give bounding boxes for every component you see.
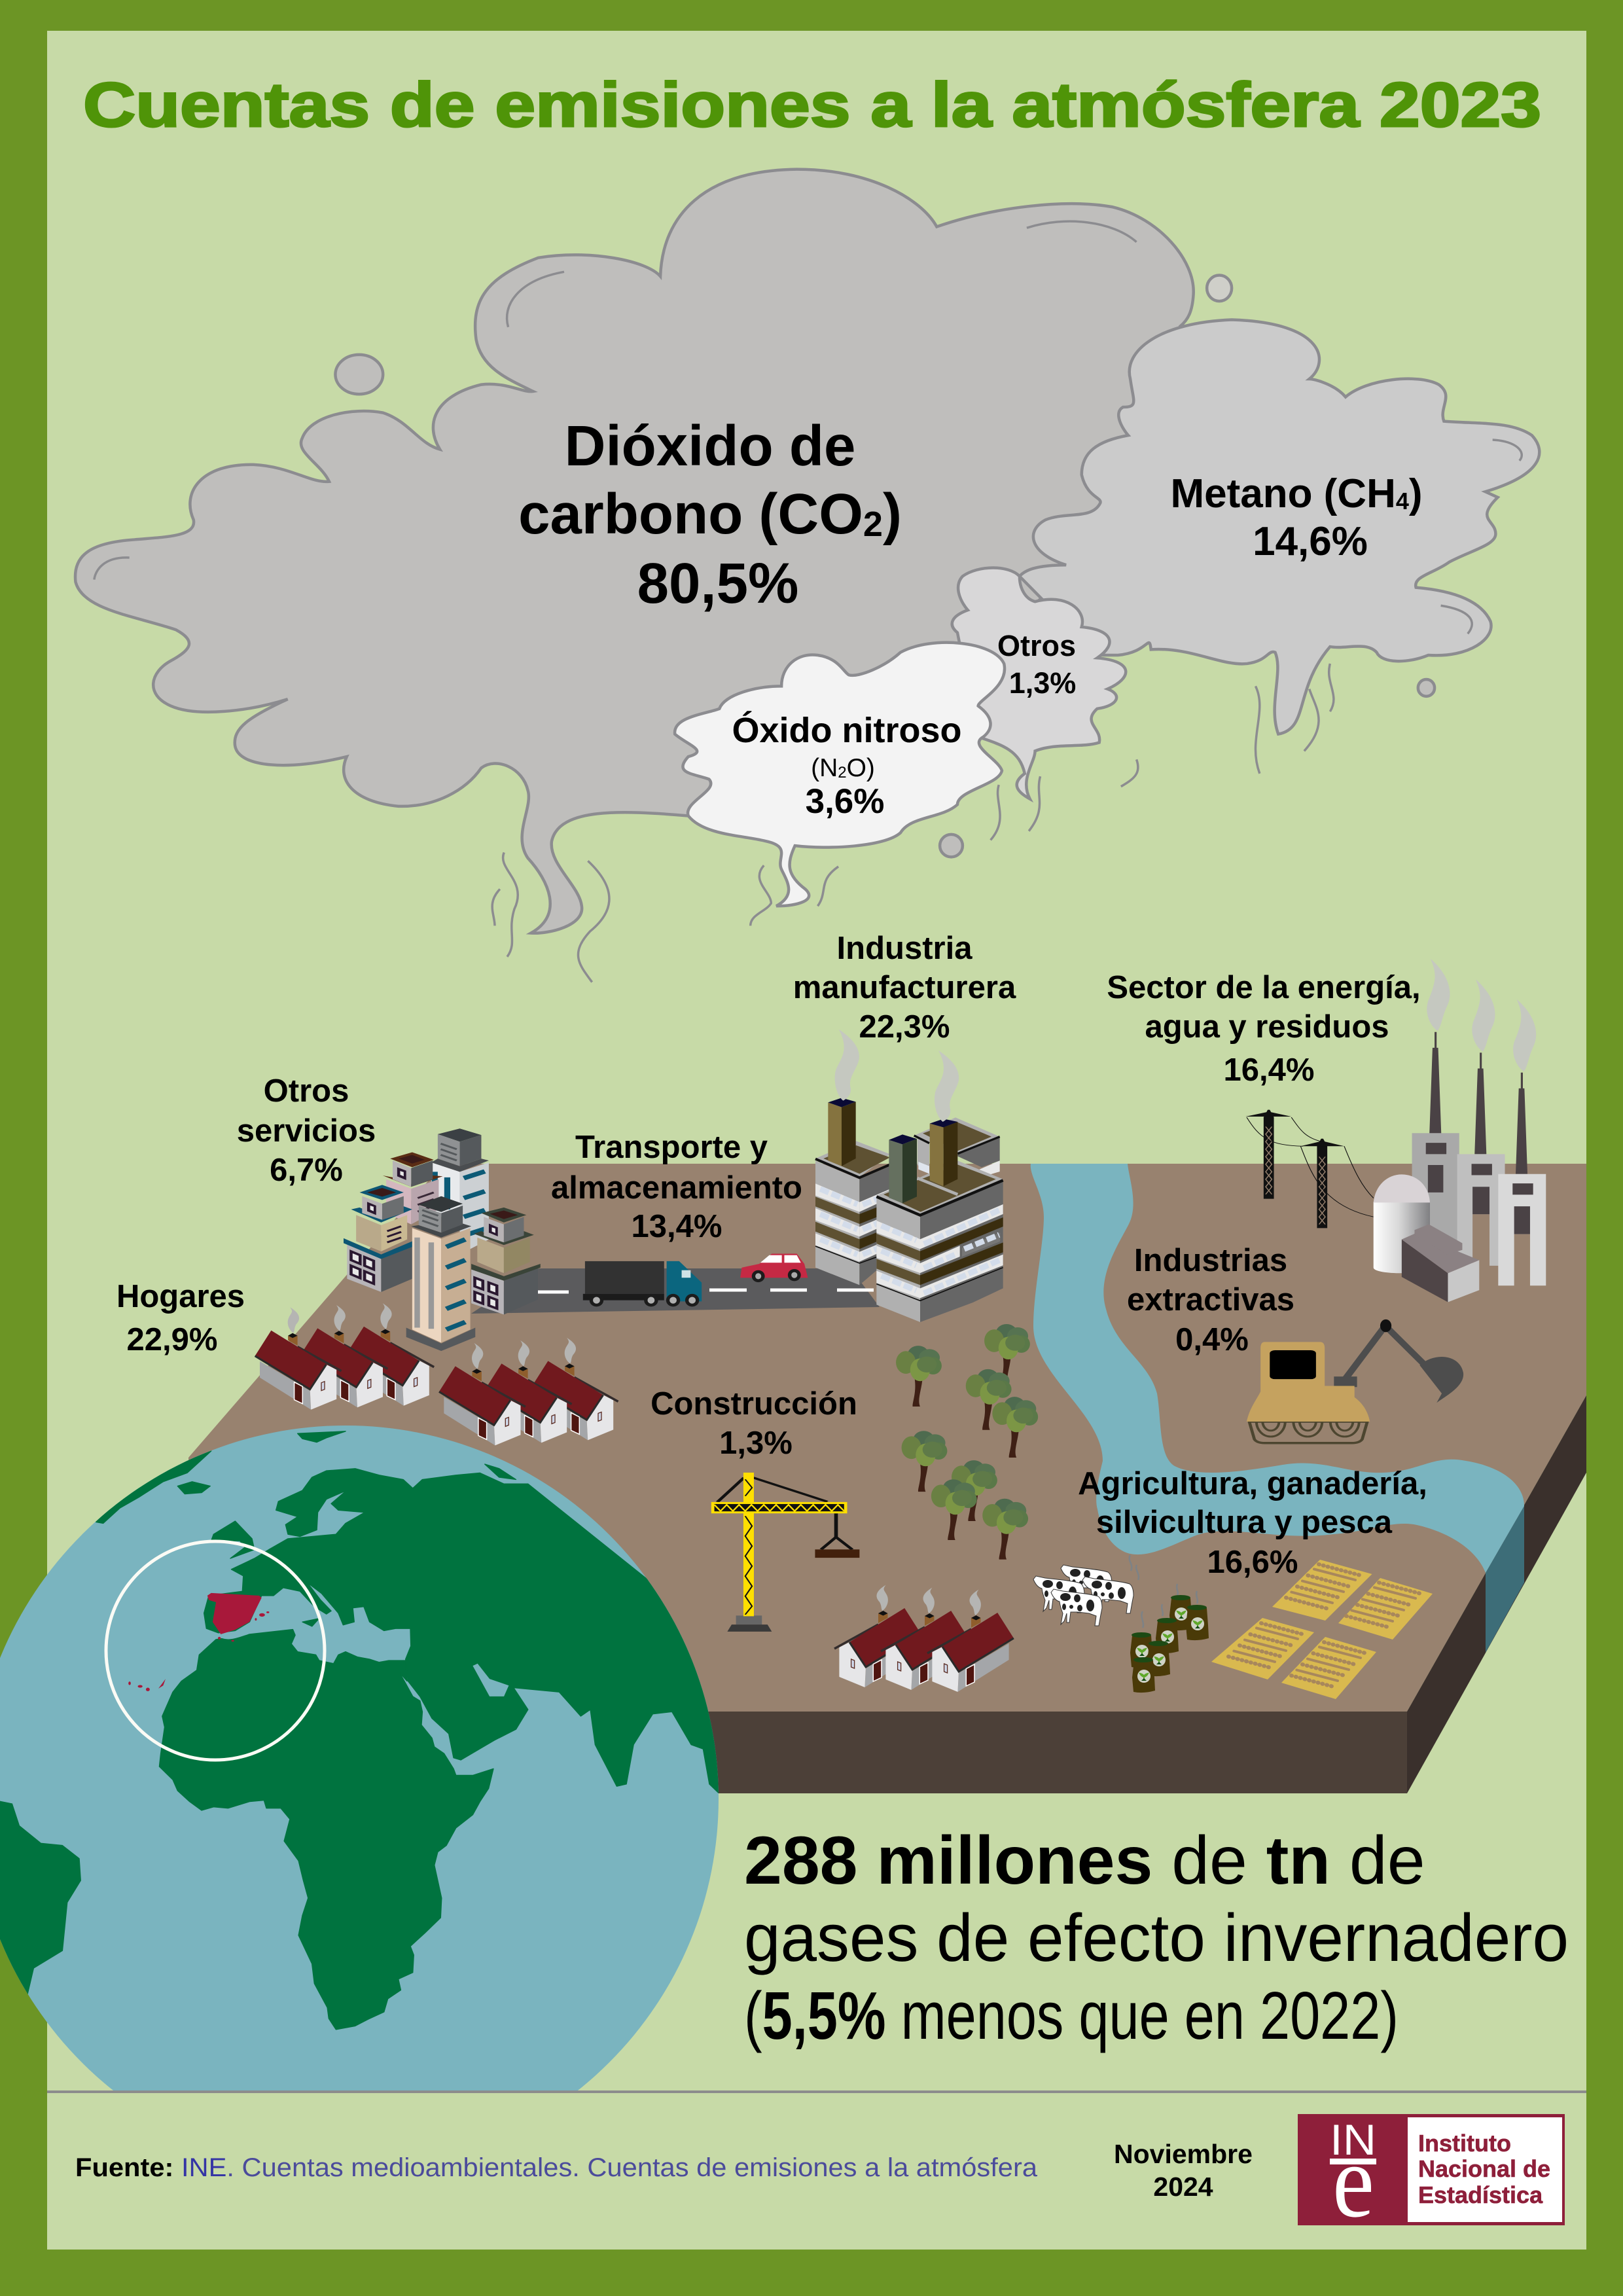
cloud: nitrous oxide: [675, 643, 1005, 906]
globe: [0, 1426, 719, 2090]
label: construction: [651, 1386, 857, 1461]
label: construction: 1,3%: [719, 1426, 793, 1461]
stacks: [1412, 959, 1546, 1285]
label: methane: 4: [1396, 488, 1409, 514]
label: nitrous oxide: 2: [838, 764, 847, 781]
headline: total emissions: [744, 1823, 1569, 2053]
label: other gases: [997, 629, 1076, 700]
left wing: [815, 1141, 890, 1285]
label: other services: servicios: [237, 1113, 376, 1149]
label: extractive: 0,4%: [1175, 1322, 1249, 1357]
icon: truck: [583, 1261, 702, 1306]
machine block: [1402, 1225, 1479, 1302]
road: [471, 1268, 880, 1314]
label: transport: almacenamiento: [551, 1170, 802, 1206]
icon: cows: [1033, 1555, 1139, 1626]
Arctic islands: [298, 1431, 346, 1443]
label: carbon dioxide: Dióxido de: [565, 414, 855, 478]
label: manufacturing: [793, 931, 1016, 1045]
label: construction: Construcción: [651, 1386, 857, 1422]
label: nitrous oxide: O): [847, 754, 875, 782]
label: energy: 16,4%: [1224, 1052, 1314, 1088]
icon: fertilizer sacks: [1130, 1584, 1209, 1693]
icon: houses second row: [439, 1338, 618, 1445]
label: agriculture: [1078, 1466, 1427, 1580]
river: [1031, 1164, 1524, 1573]
icon: crane: [711, 1473, 859, 1632]
label: energy: [1107, 970, 1421, 1088]
label: other services: [237, 1073, 376, 1188]
chimney A: [828, 1098, 856, 1166]
reactor dome: [1374, 1174, 1430, 1273]
label: energy: agua y residuos: [1145, 1009, 1389, 1045]
label: other services: 6,7%: [270, 1153, 343, 1188]
label: transport: 13,4%: [632, 1209, 722, 1244]
trees: [896, 1324, 1038, 1560]
British Isles: [211, 1521, 255, 1558]
headline: total emissions: gases de efecto invernadero: [744, 1900, 1569, 1975]
icon: manufacturing factory: [815, 1030, 1003, 1322]
logo: INE: Nacional de: [1418, 2155, 1550, 2182]
label: nitrous oxide: Óxido nitroso: [732, 711, 962, 750]
label: extractive: [1127, 1243, 1294, 1357]
icon: power plant: [1245, 959, 1546, 1302]
label: manufacturing: manufacturera: [793, 970, 1016, 1005]
label: households: Hogares: [116, 1279, 245, 1314]
label: households: 22,9%: [127, 1322, 217, 1357]
date: Noviembre: [1114, 2139, 1253, 2169]
logo: INE: e: [1332, 2123, 1374, 2239]
Iceland: [177, 1482, 210, 1494]
source: Fuente: INE. Cuentas medioambientales. Cuentas de emisiones a la atmósfera: [75, 2153, 1038, 2182]
label: agriculture: Agricultura, ganadería,: [1078, 1466, 1427, 1501]
icon: houses bottom row: [834, 1585, 1014, 1692]
locator circle: [106, 1541, 325, 1760]
factory smoke: [835, 1030, 959, 1122]
label: nitrous oxide: 3,6%: [806, 782, 884, 821]
South America: [0, 1799, 80, 1999]
label: other gases: 1,3%: [1009, 666, 1076, 700]
Africa: [159, 1629, 493, 2030]
label: nitrous oxide: [732, 711, 962, 821]
date: 2024: [1153, 2172, 1213, 2202]
cloud: other gases: [952, 568, 1126, 840]
label: transport: [551, 1130, 802, 1244]
chimney C: [930, 1119, 957, 1186]
icon: houses top-left row: [255, 1303, 434, 1410]
isometric land block: [188, 1164, 1586, 1793]
footer cover: [47, 2092, 1586, 2250]
headline: total emissions: 288 millones de tn de: [744, 1823, 1425, 1899]
label: agriculture: 16,6%: [1207, 1545, 1298, 1580]
label: manufacturing: 22,3%: [859, 1009, 950, 1045]
label: extractive: Industrias: [1134, 1243, 1287, 1278]
label: carbon dioxide: ): [883, 482, 902, 546]
icon: car: [740, 1253, 808, 1282]
cloud: carbon dioxide: [75, 170, 1435, 982]
title: Cuentas de emisiones a la atmósfera 2023: [83, 70, 1541, 140]
label: carbon dioxide: 2: [863, 505, 883, 544]
tan tower: [406, 1196, 475, 1351]
chimney green: [889, 1134, 917, 1203]
pink building: [383, 1152, 443, 1225]
Persian Gulf: [473, 1664, 508, 1696]
logo: INE: [1298, 2114, 1565, 2239]
icon: crop fields: [1211, 1560, 1433, 1699]
label: carbon dioxide: 80,5%: [637, 552, 798, 615]
icon: excavator: [1247, 1319, 1463, 1443]
Eurasia: [204, 1468, 719, 1793]
cloud: methane: [1020, 320, 1539, 787]
Spain: [207, 1593, 262, 1634]
olive building: [471, 1208, 541, 1314]
label: methane: Metano (CH: [1170, 471, 1396, 516]
logo: INE: Instituto: [1418, 2130, 1511, 2157]
white tower: [431, 1128, 489, 1255]
label: methane: 14,6%: [1253, 519, 1368, 564]
date: [1114, 2139, 1253, 2202]
label: manufacturing: Industria: [837, 931, 972, 966]
label: methane: [1170, 471, 1423, 564]
label: methane: ): [1409, 471, 1423, 516]
label: energy: Sector de la energía,: [1107, 970, 1421, 1005]
label: agriculture: silvicultura y pesca: [1096, 1505, 1393, 1540]
label: transport: Transporte y: [575, 1130, 768, 1165]
Greenland: [96, 1451, 211, 1523]
headline: total emissions: (5,5% menos que en 2022): [744, 1978, 1399, 2053]
logo: INE: IN: [1330, 2115, 1376, 2164]
label: other gases: Otros: [997, 629, 1076, 662]
label: carbon dioxide: [518, 414, 902, 615]
label: nitrous oxide: (N: [811, 754, 838, 782]
back wing: [914, 1117, 1000, 1177]
label: carbon dioxide: carbono (CO: [518, 482, 863, 546]
icon: city buildings: [344, 1128, 541, 1351]
logo: INE: Estadística: [1418, 2181, 1543, 2208]
label: households: [116, 1279, 245, 1357]
label: extractive: extractivas: [1127, 1282, 1294, 1318]
front wing: [876, 1160, 1003, 1322]
Sicily: [302, 1619, 319, 1626]
label: other services: Otros: [264, 1073, 349, 1109]
pylons: [1245, 1110, 1374, 1228]
blue building: [344, 1185, 412, 1292]
